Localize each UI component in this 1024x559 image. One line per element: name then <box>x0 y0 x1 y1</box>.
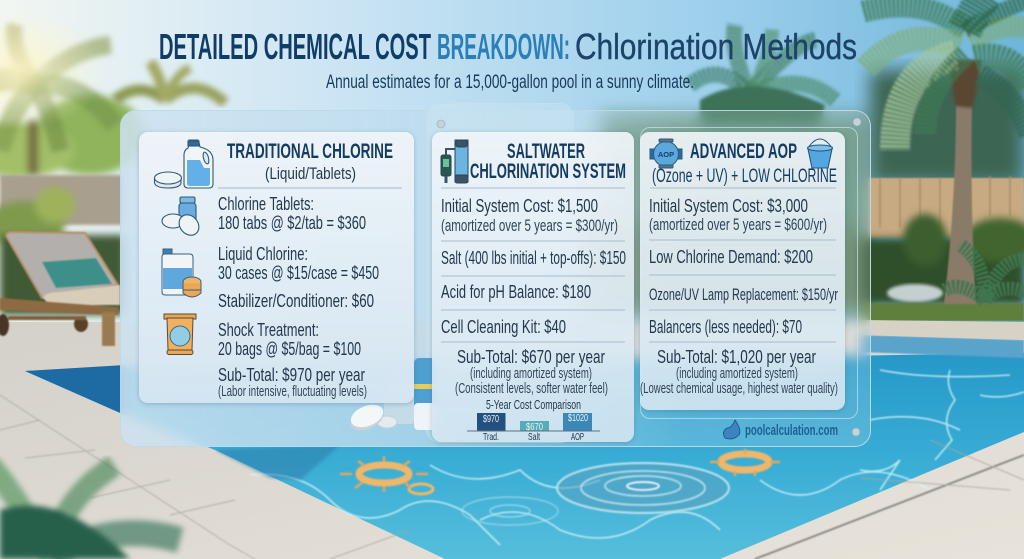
pool water <box>25 353 1024 559</box>
saltwater content: Cell Cleaning Kit: $40 <box>441 316 566 337</box>
bar chart: 5-year cost comparison: $670 <box>526 421 543 433</box>
AOP heading: ADVANCED AOP <box>690 140 797 163</box>
advanced AOP content: (amortized over 5 years = $600/yr) <box>649 216 827 234</box>
card: saltwater chlorination <box>432 132 634 442</box>
subtotal AOP: Sub-Total: $1,020 per year <box>657 346 816 367</box>
title: Chlorination Methods <box>575 26 857 67</box>
chlorine tablets text: Chlorine Tablets: <box>218 193 314 214</box>
advanced AOP content <box>640 139 838 397</box>
pool left tiled section <box>25 365 125 415</box>
saltwater rows: Initial System Cost: $1,500 <box>441 195 598 216</box>
icon: jug and stabilizer <box>162 249 201 297</box>
bar chart: 5-year cost comparison: AOP <box>571 431 584 443</box>
advanced AOP content: (Ozone + UV) + LOW CHLORINE <box>652 166 837 187</box>
traditional chlorine content: (Labor intensive, fluctuating levels) <box>218 383 367 400</box>
trees behind panel <box>580 115 870 315</box>
bar chart: 5-year cost comparison: $1020 <box>568 412 588 424</box>
icon: AOP sphere <box>650 139 682 168</box>
left palm fronds <box>0 25 115 150</box>
icon: shock bag <box>164 314 196 354</box>
bar chart: 5-year cost comparison <box>467 398 600 443</box>
subtotal saltwater: Sub-Total: $670 per year <box>457 346 605 367</box>
traditional chlorine content: (Liquid/Tablets) <box>265 164 356 183</box>
pool tile band <box>860 335 1024 358</box>
saltwater heading: SALTWATER <box>507 140 585 163</box>
deck joints <box>0 395 1024 559</box>
icon: AOP sphere: AOP <box>658 150 674 159</box>
saltwater content: Acid for pH Balance: $180 <box>441 281 591 302</box>
deck <box>0 322 1024 559</box>
bar chart: 5-year cost comparison: Trad. <box>483 431 499 443</box>
liquid chlorine text: Liquid Chlorine: <box>218 243 308 264</box>
left trees <box>0 95 145 178</box>
saltwater content: Salt (400 lbs initial + top-offs): $150 <box>441 247 626 268</box>
title: BREAKDOWN: <box>437 26 570 67</box>
right glass inner edge <box>640 127 858 419</box>
AOP rows: Initial System Cost: $3,000 <box>649 195 808 216</box>
traditional chlorine content: 180 tabs @ $2/tab = $360 <box>218 212 366 233</box>
title <box>159 26 857 67</box>
advanced AOP content: Balancers (less needed): $70 <box>649 316 802 337</box>
icon: salt cell <box>441 140 468 183</box>
floating rings <box>340 449 780 494</box>
grass <box>860 303 1024 321</box>
outer glass panel <box>120 110 871 447</box>
saltwater content <box>441 140 626 443</box>
subtotal traditional: Sub-Total: $970 per year <box>218 364 365 385</box>
saltwater content: (including amortized system) <box>470 365 592 382</box>
traditional chlorine content: 30 cases @ $15/case = $450 <box>218 262 379 283</box>
right backdrop trees <box>870 70 1024 185</box>
stabilizer text: Stabilizer/Conditioner: $60 <box>218 290 374 311</box>
icon: bucket <box>808 139 832 168</box>
foreground fern <box>0 465 180 559</box>
lounge chair <box>0 232 120 346</box>
saltwater content: CHLORINATION SYSTEM <box>470 160 626 183</box>
brand logo <box>723 420 838 439</box>
advanced AOP content: (including amortized system) <box>676 365 798 382</box>
palm fronds <box>862 0 1024 150</box>
brand logo: poolcalculation.com <box>745 423 838 439</box>
advanced AOP content: Ozone/UV Lamp Replacement: $150/yr <box>649 285 838 304</box>
water ripples <box>462 463 729 525</box>
top center palm <box>690 25 835 125</box>
back glass panel <box>426 103 574 443</box>
card: traditional chlorine <box>139 132 414 403</box>
traditional heading: TRADITIONAL CHLORINE <box>227 140 393 163</box>
advanced AOP content: Low Chlorine Demand: $200 <box>649 246 813 267</box>
advanced AOP content: (Lowest chemical usage, highest water quality) <box>640 380 838 397</box>
saltwater content: (amortized over 5 years = $300/yr) <box>441 217 618 235</box>
icon: tablets <box>162 197 203 239</box>
screw dots <box>437 118 861 436</box>
card: advanced AOP <box>640 132 845 410</box>
icon: jug and tablet <box>154 140 213 188</box>
bar chart: 5-year cost comparison: 5-Year Cost Comparison <box>486 398 581 412</box>
subtitle: Annual estimates for a 15,000-gallon pool in a sunny climate. <box>326 72 694 93</box>
left fence <box>0 175 125 225</box>
title: DETAILED CHEMICAL COST <box>159 26 431 67</box>
traditional chlorine content <box>154 140 402 400</box>
distant palm upper left <box>115 62 225 103</box>
right fence <box>868 178 1024 238</box>
bar chart: 5-year cost comparison: $970 <box>483 413 499 425</box>
traditional chlorine content: 20 bags @ $5/bag = $100 <box>218 338 361 359</box>
shock treatment text: Shock Treatment: <box>218 319 319 340</box>
bar chart: 5-year cost comparison: Salt <box>528 431 540 443</box>
saltwater content: (Consistent levels, softer water feel) <box>455 380 608 397</box>
water caustics <box>250 370 1024 545</box>
palm trunk <box>944 105 976 304</box>
